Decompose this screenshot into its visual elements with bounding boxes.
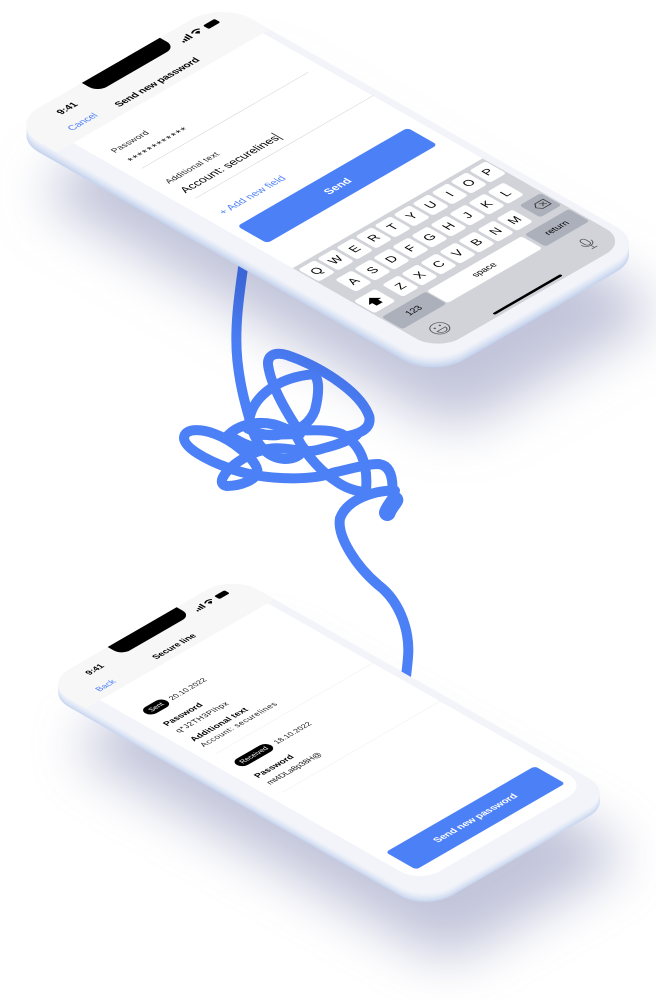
keyboard keys: J	[459, 210, 476, 220]
keyboard keys: V	[448, 247, 468, 259]
phone: send new password (upper)	[26, 12, 629, 368]
status and navigation bar	[82, 38, 171, 89]
phone: secure line (lower)	[58, 584, 600, 902]
keyboard background	[292, 158, 628, 351]
keyboard keys: S	[363, 265, 382, 276]
keyboard keys: W	[325, 253, 347, 266]
tangled cable	[184, 247, 408, 690]
keyboard keys: K	[477, 199, 496, 210]
shadow: lower phone	[65, 637, 637, 964]
keyboard keys: F	[401, 243, 420, 254]
keyboard keys: D	[382, 253, 402, 265]
status icons	[192, 590, 230, 612]
time: 9:41	[83, 662, 107, 676]
keyboard keys: 123	[403, 304, 425, 317]
keyboard keys: E	[345, 243, 364, 254]
keyboard keys: T	[383, 221, 402, 232]
icon: emoji	[426, 320, 454, 336]
notch	[108, 607, 186, 652]
message: sent: Account: securelines	[198, 701, 280, 748]
keyboard keys: R	[364, 232, 384, 244]
form: additional text field	[162, 77, 374, 199]
send new password button	[386, 766, 565, 870]
status icons	[177, 18, 220, 43]
message: received	[230, 720, 346, 786]
keyboard keys: H	[439, 221, 459, 232]
shadow: upper phone	[31, 68, 656, 433]
divider	[283, 701, 441, 792]
phone body edge	[9, 2, 647, 377]
keyboard keys: N	[486, 226, 506, 237]
back link: Back	[93, 678, 119, 693]
keyboard keys: C	[429, 258, 449, 270]
message: received: 18.10.2022	[271, 721, 314, 745]
screen content	[86, 590, 576, 876]
form: additional text field: Additional text	[162, 150, 222, 185]
time: 9:41	[54, 101, 82, 116]
screen white area	[74, 34, 482, 268]
keyboard keys	[298, 161, 590, 329]
message: sent: 20.10.2022	[166, 677, 209, 701]
send button	[237, 128, 437, 243]
notch	[82, 38, 171, 89]
keyboard keys: Q	[307, 265, 327, 277]
keyboard keys: Y	[402, 210, 421, 221]
message: received: mt4DLa8p38H@	[264, 751, 324, 786]
keyboard keys: A	[344, 275, 364, 287]
form: password field	[108, 53, 308, 169]
keyboard keys: return	[542, 219, 572, 236]
keyboard keys: space	[469, 261, 499, 278]
message: received: Received	[238, 746, 271, 765]
keyboard keys: U	[421, 199, 441, 211]
keyboard keys: M	[504, 214, 525, 226]
form: password field: Password	[108, 129, 152, 154]
keyboard keys: X	[410, 270, 429, 281]
keyboard keys: Z	[391, 281, 410, 291]
divider	[215, 663, 374, 754]
screen content	[56, 19, 615, 344]
title: Secure line	[149, 632, 199, 660]
form: password field: ************	[125, 125, 193, 165]
send button: Send	[321, 177, 355, 196]
message: sent	[139, 668, 280, 748]
keyboard keys: I	[442, 190, 457, 198]
icon: microphone	[576, 237, 599, 250]
message: sent: Password	[160, 701, 205, 727]
send new password button: Send new password	[431, 792, 521, 844]
message: sent: Sent	[146, 701, 166, 713]
home indicator	[492, 274, 563, 315]
message: sent: Additional text	[187, 706, 251, 743]
cancel link: Cancel	[65, 112, 101, 132]
keyboard keys: B	[467, 237, 486, 248]
message: received: Password	[251, 753, 296, 779]
message: sent: q*J2TH3Plhpx	[173, 701, 231, 734]
screen white area	[100, 603, 591, 884]
keyboard keys: L	[497, 188, 515, 198]
form: additional text field: Account: securelines	[177, 134, 283, 195]
keyboard keys: G	[419, 231, 440, 243]
status and navigation bar	[108, 607, 186, 652]
keyboard keys: P	[478, 167, 497, 178]
title: Send new password	[112, 56, 203, 109]
keyboard keys: O	[459, 177, 479, 189]
phone body edge	[43, 575, 615, 910]
add new field link: + Add new field	[217, 175, 289, 216]
